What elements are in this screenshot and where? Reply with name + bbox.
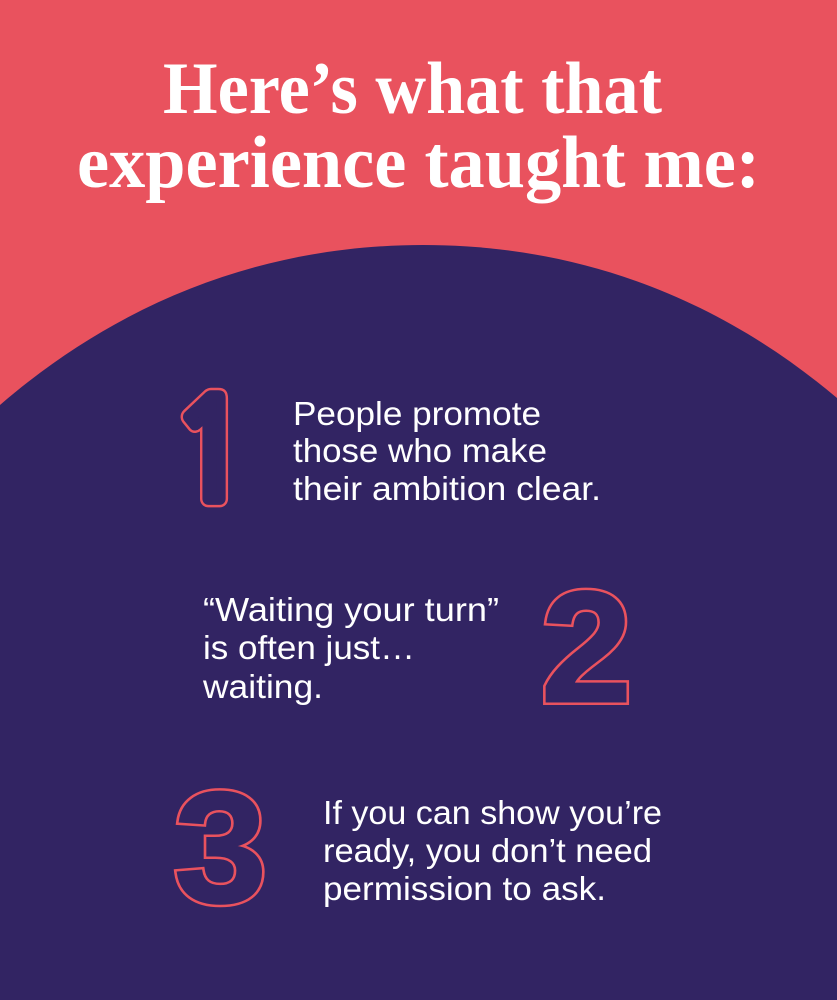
text block 3: ready, you don’t need <box>323 832 652 869</box>
item 2 <box>202 560 632 736</box>
number 1: 1 <box>170 383 252 521</box>
text block 1: those who make <box>293 432 547 469</box>
item 1 <box>170 383 601 521</box>
title <box>77 48 760 204</box>
number 3: 3 <box>174 760 267 936</box>
text block 1 <box>293 395 601 507</box>
number 2: 2 <box>541 560 632 736</box>
number 1: 1 <box>170 383 252 521</box>
number 3: 3 <box>174 760 267 936</box>
text block 1: their ambition clear. <box>293 470 601 507</box>
title: experience taught me: <box>77 122 760 204</box>
panel: navy arc <box>0 245 837 1000</box>
text block 2: is often just… <box>203 629 415 666</box>
text block 3 <box>323 794 662 907</box>
text block 3: If you can show you’re <box>323 794 662 831</box>
text block 2: “Waiting your turn” <box>203 591 499 628</box>
text block 2: waiting. <box>202 668 323 705</box>
text block 3: permission to ask. <box>323 870 606 907</box>
title: Here’s what that <box>163 48 662 130</box>
text block 2 <box>202 591 499 705</box>
text block 1: People promote <box>293 395 541 432</box>
number 2: 2 <box>541 560 632 736</box>
item 3 <box>174 760 662 936</box>
